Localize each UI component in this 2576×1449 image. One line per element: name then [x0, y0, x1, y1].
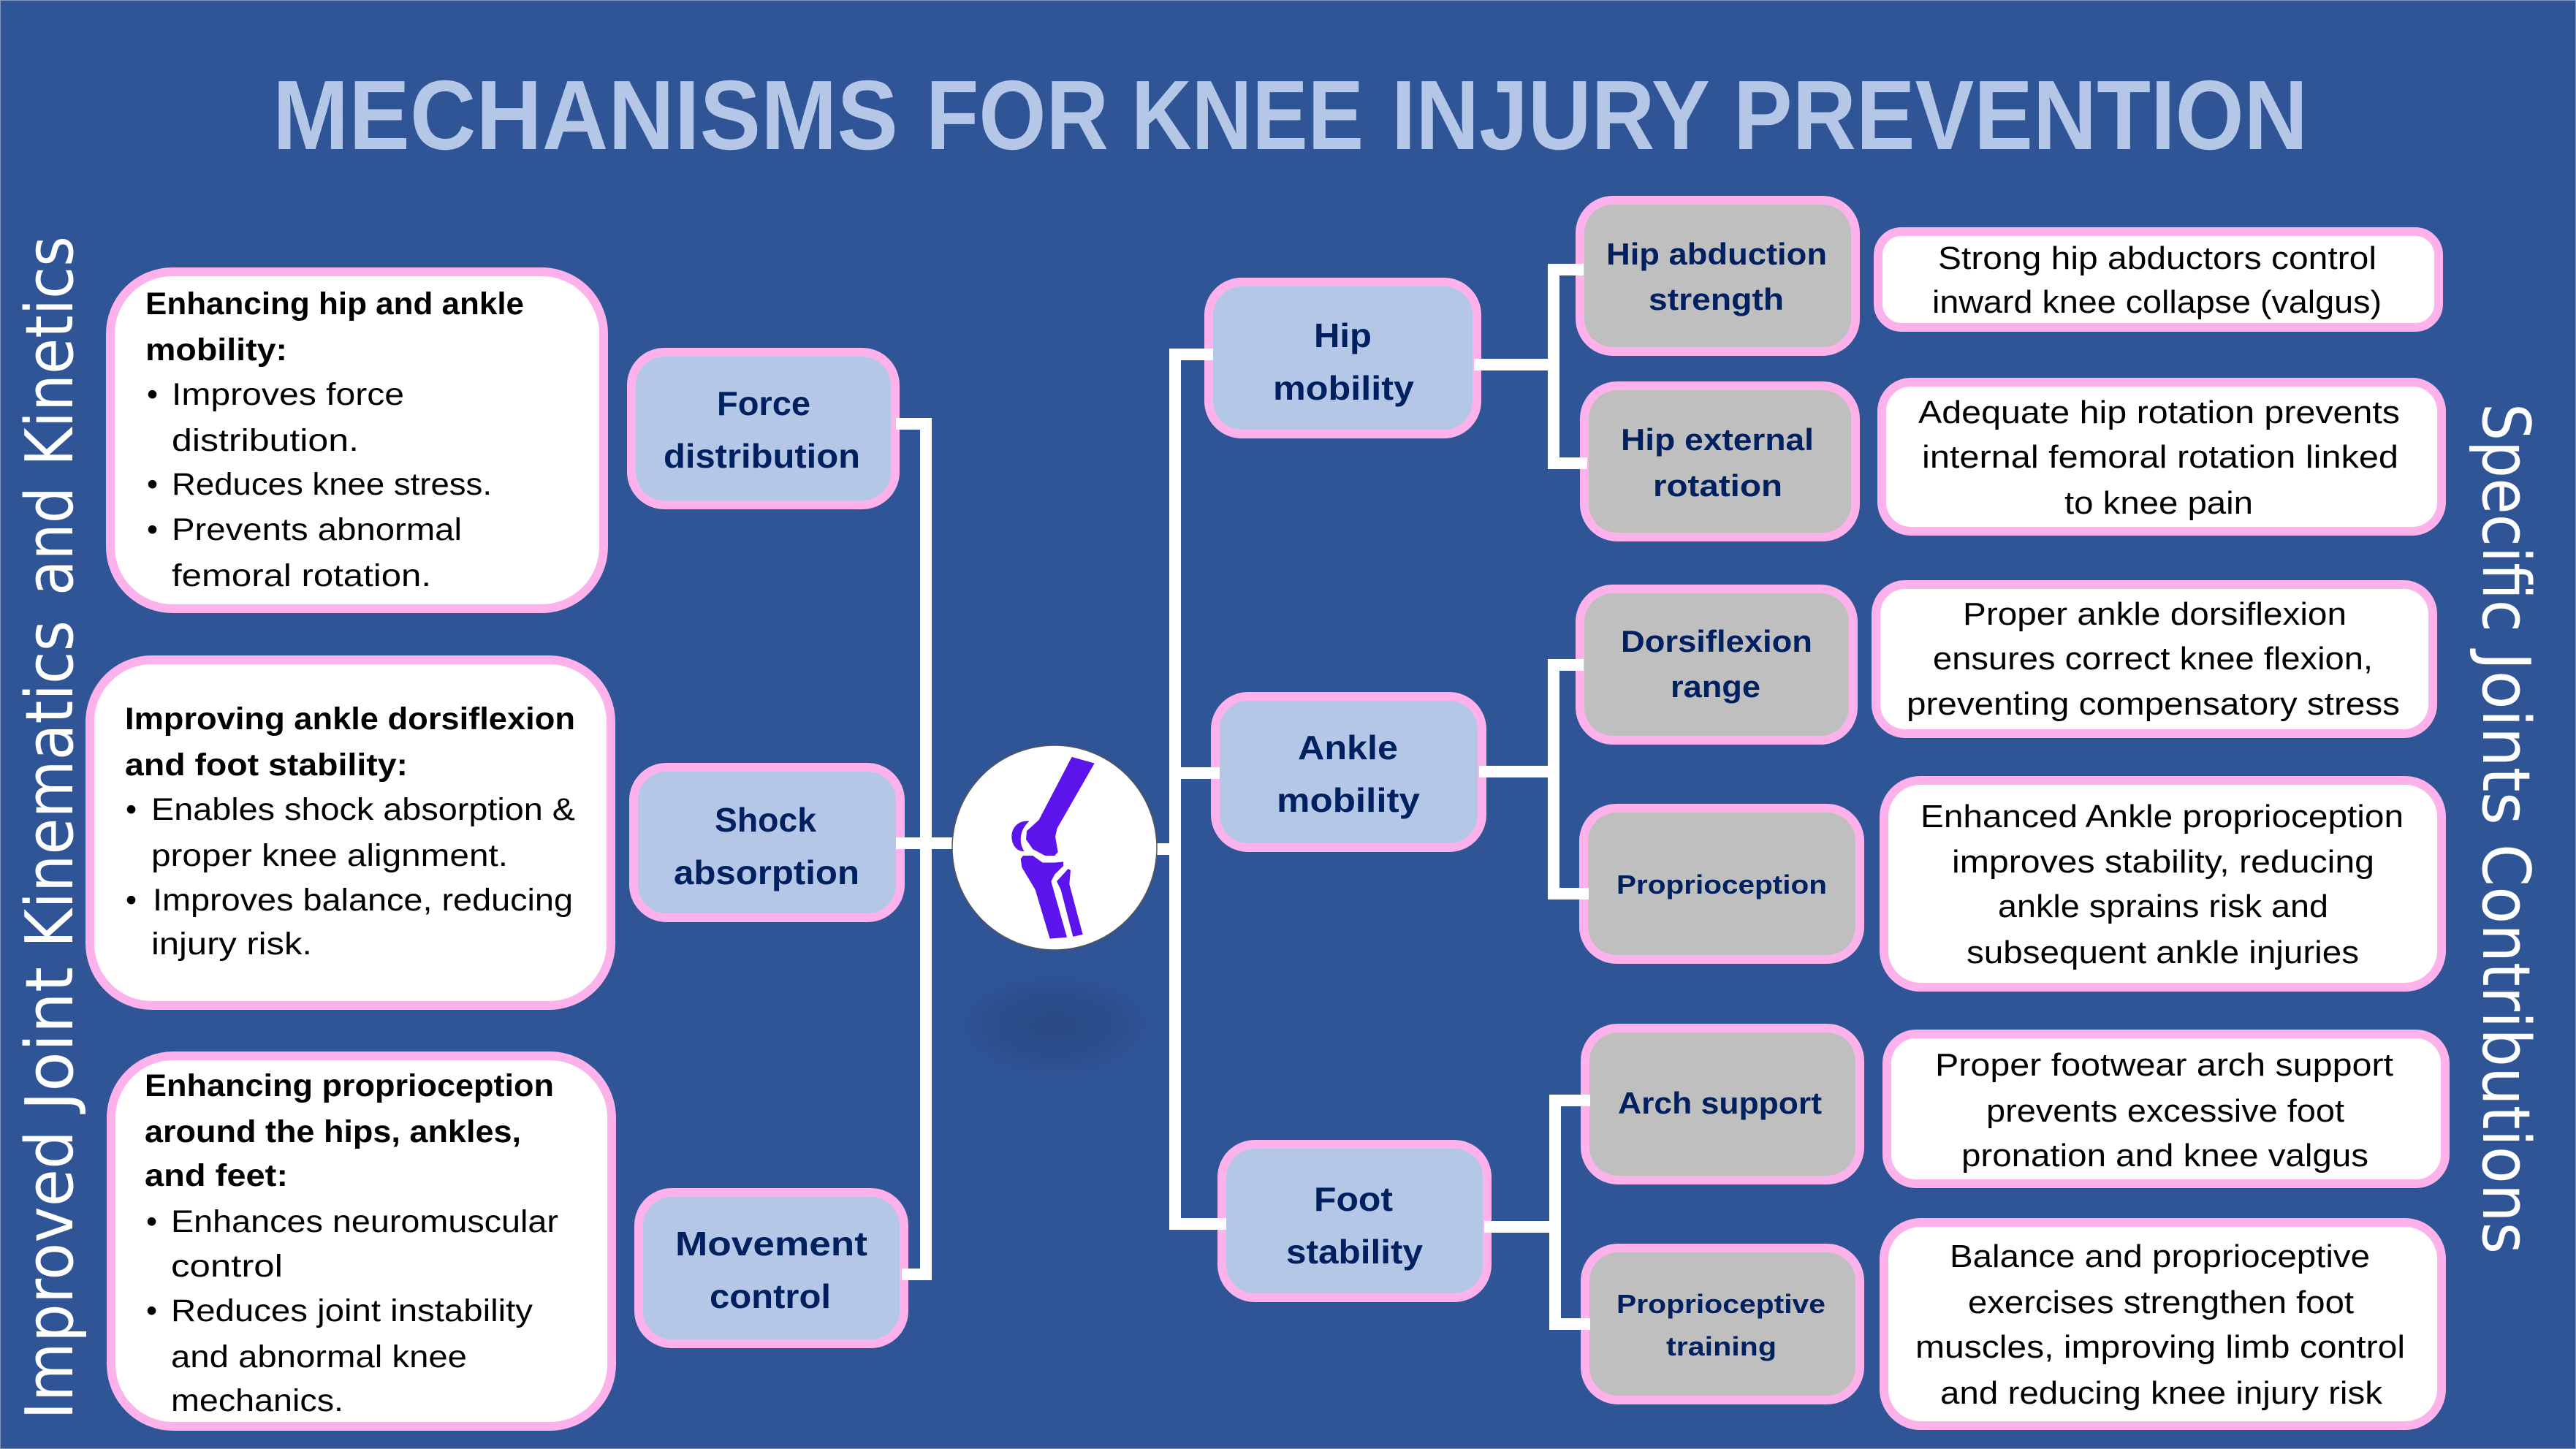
node: hip mobility: mobility — [1273, 369, 1414, 407]
shadow under knee icon — [956, 973, 1153, 1078]
text: ankle dorsiflexion and foot stability — [125, 701, 575, 962]
explanation: ankle dorsiflexion — [1876, 585, 2433, 734]
node: hip external rotation — [1584, 386, 1855, 537]
connector: hip branch — [1474, 270, 1587, 463]
text: hip and ankle mobility: Reduces knee stress. — [172, 467, 492, 502]
text: ankle dorsiflexion and foot stability: proper knee alignment. — [151, 838, 508, 873]
text: hip and ankle mobility: distribution. — [172, 423, 359, 458]
title: PREVENTION — [1733, 60, 2308, 170]
explanation: ankle dorsiflexion: ensures correct knee flexion, — [1933, 641, 2373, 677]
explanation: footwear arch support — [1887, 1034, 2445, 1184]
node: movement control: control — [710, 1277, 831, 1315]
explanation: ankle dorsiflexion: Proper ankle dorsiflexion — [1963, 596, 2347, 632]
panel: ankle dorsiflexion and foot stability — [90, 660, 611, 1005]
node: shock absorption: Shock — [715, 801, 816, 839]
explanation: footwear arch support: pronation and knee valgus — [1961, 1138, 2368, 1174]
explanation: ankle proprioception: subsequent ankle injuries — [1967, 935, 2359, 970]
left side label: Kinetics — [12, 236, 88, 466]
left side label: Joint — [12, 967, 88, 1114]
explanation: ankle proprioception — [1884, 780, 2442, 987]
text: hip and ankle mobility: Prevents abnormal — [172, 512, 462, 547]
explanation: footwear arch support: prevents excessive foot — [1986, 1093, 2344, 1129]
node: movement control: Movement — [675, 1225, 867, 1263]
explanation: hip rotation — [1882, 382, 2442, 531]
text: proprioception around hips, ankles, feet: and abnormal knee — [171, 1339, 467, 1374]
explanation: hip rotation: to knee pain — [2064, 485, 2253, 521]
node: foot stability: Foot — [1314, 1180, 1393, 1218]
text: proprioception around hips, ankles, feet: around the hips, ankles, — [145, 1114, 521, 1149]
right side label — [2467, 403, 2544, 1254]
explanation: balance exercises — [1884, 1222, 2442, 1426]
title: KNEE — [1131, 60, 1364, 170]
node: movement control — [639, 1193, 904, 1344]
text: hip and ankle mobility: femoral rotation. — [172, 558, 431, 593]
explanation: hip abductors: Strong hip abductors control — [1938, 240, 2376, 276]
node: hip abduction strength: Hip abduction — [1606, 237, 1827, 271]
left side label: and — [12, 487, 88, 596]
explanation: hip rotation: Adequate hip rotation prevents — [1918, 395, 2400, 430]
node: shock absorption: absorption — [674, 853, 859, 891]
title: INJURY — [1391, 60, 1710, 170]
title: FOR — [926, 60, 1109, 170]
text: hip and ankle mobility: • — [147, 512, 158, 547]
text: hip and ankle mobility: Improves force — [172, 377, 404, 412]
right side label: Joints — [2467, 648, 2544, 825]
explanation: hip abductors — [1878, 232, 2439, 327]
node: hip external rotation: Hip external — [1621, 422, 1814, 457]
text: proprioception around hips, ankles, feet: and feet: — [145, 1158, 288, 1193]
connector: left bus — [896, 424, 965, 1274]
node: hip abduction strength: strength — [1649, 282, 1784, 316]
text: proprioception around hips, ankles, feet: Enhances neuromuscular — [171, 1204, 558, 1239]
text: hip and ankle mobility: mobility: — [145, 332, 287, 368]
title — [273, 60, 2308, 170]
node: hip external rotation: rotation — [1653, 468, 1782, 503]
node: hip mobility: Hip — [1314, 316, 1372, 354]
explanation: ankle proprioception: Enhanced Ankle proprioception — [1920, 799, 2404, 834]
explanation: hip rotation: internal femoral rotation linked — [1922, 439, 2398, 475]
text: hip and ankle mobility: • — [147, 377, 158, 412]
panel: proprioception around hips, ankles, feet — [111, 1056, 612, 1426]
node: hip abduction strength — [1580, 200, 1855, 351]
left side label: Improved — [12, 1130, 88, 1420]
explanation: balance exercises: exercises strengthen foot — [1968, 1285, 2354, 1320]
text: ankle dorsiflexion and foot stability: and foot stability: — [125, 748, 408, 783]
text: proprioception around hips, ankles, feet: Reduces joint instability — [171, 1293, 533, 1328]
text: proprioception around hips, ankles, feet: • — [146, 1204, 157, 1239]
node: ankle mobility: Ankle — [1298, 729, 1398, 767]
explanation: footwear arch support: Proper footwear arch support — [1935, 1047, 2393, 1083]
node: dorsiflexion range: Dorsiflexion — [1621, 624, 1812, 658]
explanation: ankle dorsiflexion: preventing compensatory stress — [1907, 686, 2400, 722]
left side label: Kinematics — [12, 620, 88, 948]
node: proprioceptive training — [1585, 1248, 1860, 1400]
node: foot stability: stability — [1286, 1233, 1423, 1271]
text: ankle dorsiflexion and foot stability: • — [126, 792, 137, 827]
node: dorsiflexion range — [1580, 589, 1853, 740]
node: proprioceptive training: training — [1666, 1331, 1777, 1361]
node: force distribution: distribution — [664, 437, 860, 475]
node: proprioceptive training: Proprioceptive — [1616, 1289, 1825, 1319]
explanation: ankle proprioception: improves stability, reducing — [1952, 844, 2374, 880]
text: proprioception around hips, ankles, feet: Enhancing proprioception — [145, 1068, 554, 1103]
text: hip and ankle mobility: Enhancing hip and ankle — [145, 286, 524, 322]
connector: ankle branch — [1479, 665, 1589, 894]
right side label: Specific — [2467, 403, 2544, 632]
right side label: Contributions — [2467, 844, 2544, 1254]
left side label — [12, 236, 88, 1420]
node: dorsiflexion range: range — [1671, 669, 1760, 704]
text: ankle dorsiflexion and foot stability: Enables shock absorption & — [151, 792, 575, 827]
text: hip and ankle mobility: • — [147, 467, 158, 502]
node: force distribution — [631, 352, 895, 505]
node: proprioception: Proprioception — [1616, 870, 1827, 900]
explanation: balance exercises: and reducing knee injury risk — [1940, 1375, 2383, 1411]
text: proprioception around hips, ankles, feet: mechanics. — [171, 1383, 343, 1418]
explanation: ankle proprioception: ankle sprains risk and — [1998, 889, 2328, 924]
node: hip mobility — [1209, 282, 1477, 434]
node: proprioception — [1584, 808, 1860, 959]
node: arch support — [1585, 1028, 1860, 1180]
title: MECHANISMS — [273, 60, 898, 170]
text: ankle dorsiflexion and foot stability: Improves balance, reducing — [153, 883, 573, 918]
connector: right bus — [1147, 354, 1226, 1224]
text: proprioception around hips, ankles, feet: • — [146, 1293, 157, 1328]
node: arch support: Arch support — [1618, 1086, 1822, 1120]
node: ankle mobility — [1215, 696, 1482, 848]
explanation: balance exercises: muscles, improving limb control — [1915, 1329, 2405, 1365]
text: proprioception around hips, ankles, feet: control — [171, 1249, 283, 1284]
explanation: hip abductors: inward knee collapse (valgus) — [1932, 284, 2382, 320]
connector: foot branch — [1484, 1100, 1590, 1324]
text: ankle dorsiflexion and foot stability: injury risk. — [151, 927, 312, 962]
node: shock absorption — [634, 767, 900, 918]
node: force distribution: Force — [717, 384, 810, 422]
text: hip and ankle mobility — [145, 286, 524, 593]
panel: hip and ankle mobility — [110, 272, 604, 609]
node: foot stability — [1222, 1144, 1487, 1298]
node: ankle mobility: mobility — [1277, 781, 1420, 819]
icon: knee joint — [952, 745, 1157, 950]
explanation: balance exercises: Balance and proprioceptive — [1950, 1239, 2370, 1274]
text: proprioception around hips, ankles, feet — [145, 1068, 558, 1418]
text: ankle dorsiflexion and foot stability: • — [126, 883, 137, 918]
text: ankle dorsiflexion and foot stability: Improving ankle dorsiflexion — [125, 701, 575, 737]
